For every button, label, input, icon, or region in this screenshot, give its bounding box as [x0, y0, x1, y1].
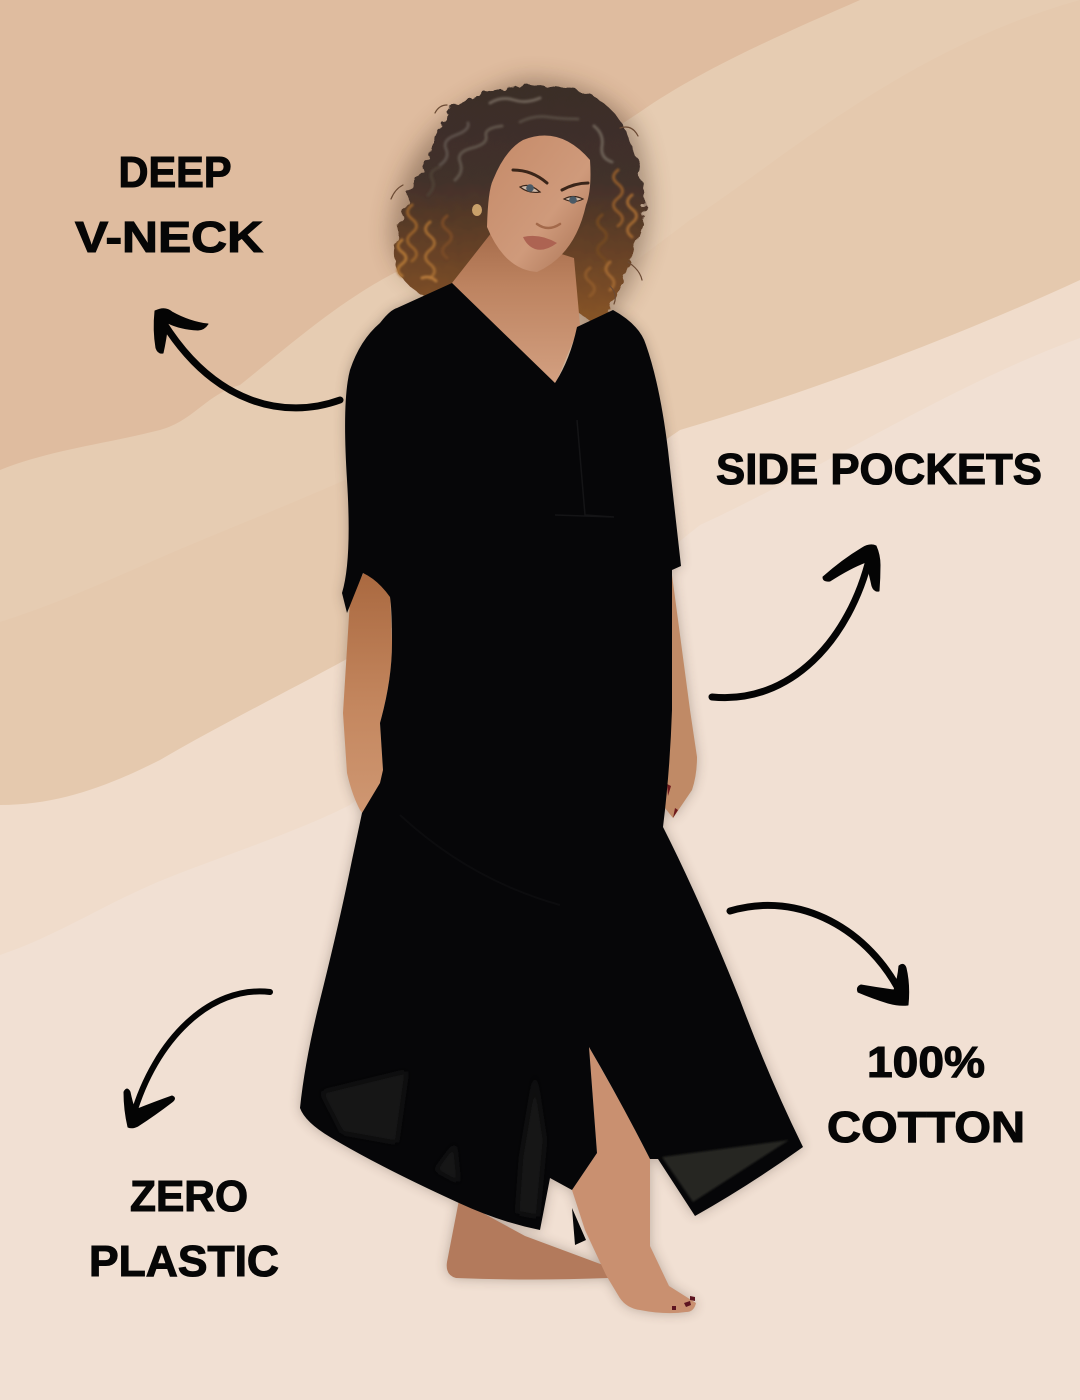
lips	[523, 236, 557, 250]
label: deep v-neck: DEEP	[118, 148, 232, 197]
bare feet and leg	[447, 1047, 696, 1313]
eyes	[520, 185, 583, 202]
arrow: to deep v-neck	[154, 309, 340, 408]
label: deep v-neck: V-NECK	[75, 213, 263, 262]
soft shadow around the cut-out	[300, 283, 803, 1313]
brows	[513, 170, 588, 190]
right arm and hand	[660, 560, 697, 818]
face	[487, 136, 590, 272]
neck and chest	[452, 232, 580, 385]
earring	[472, 204, 482, 216]
label: 100% cotton: COTTON	[827, 1103, 1025, 1152]
model figure	[300, 80, 803, 1313]
black kaftan dress	[300, 283, 803, 1230]
hair	[391, 85, 645, 326]
arrow: to zero plastic	[124, 991, 270, 1128]
label: deep v-neck	[75, 148, 263, 262]
toenails	[672, 1296, 695, 1310]
label: 100% cotton	[827, 1038, 1025, 1152]
black piece of hem behind leg	[572, 1208, 586, 1245]
label: side pockets: SIDE POCKETS	[716, 445, 1042, 494]
flyaway strands	[391, 105, 642, 304]
label: 100% cotton: 100%	[867, 1038, 985, 1087]
nose	[537, 224, 560, 228]
label: zero plastic: PLASTIC	[89, 1237, 279, 1286]
soft halo behind the head	[392, 80, 648, 325]
label: zero plastic: ZERO	[130, 1172, 248, 1221]
left arm and hand	[343, 570, 406, 846]
dress placket and fabric texture	[321, 420, 789, 1217]
arrow: to 100% cotton	[730, 905, 909, 1005]
label: zero plastic	[89, 1172, 279, 1286]
arrow: to side pockets	[712, 545, 880, 698]
